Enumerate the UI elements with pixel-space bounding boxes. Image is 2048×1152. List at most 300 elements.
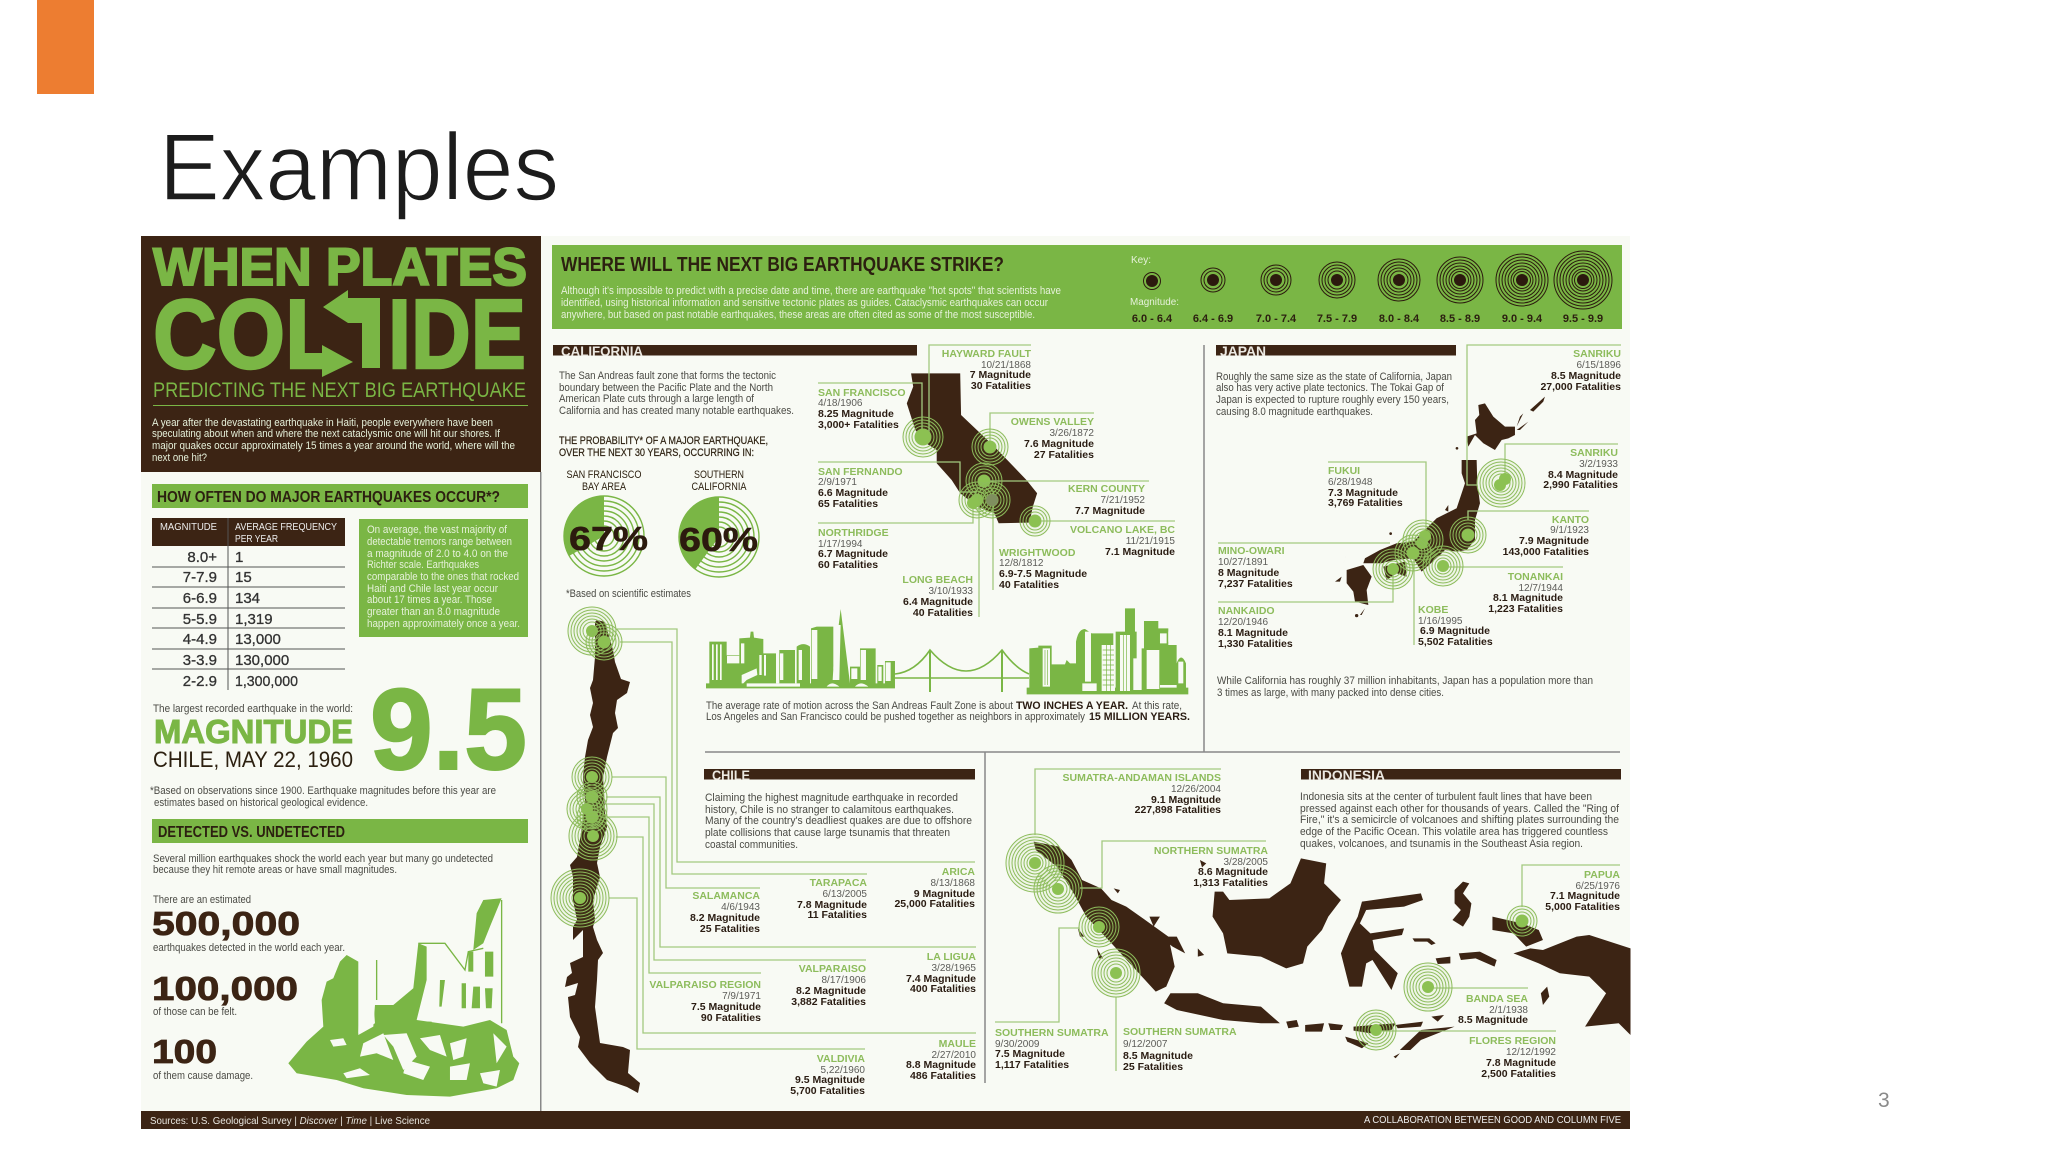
label: maule: MAULE [939,1038,976,1050]
dividers: sections [705,345,1620,1083]
label: southern sumatra 2007: SOUTHERN SUMATRA [1123,1026,1237,1038]
callout: tremors: On average, the vast majority of [367,524,508,536]
label: valparaiso [791,963,866,1008]
label: kanto: KANTO [1552,514,1589,526]
stat: 100: 100 [152,1033,217,1070]
label: san francisco: 8.25 Magnitude [818,408,894,420]
frequency table: 8.0+ [187,549,217,566]
stat: 100: of them cause damage. [153,1070,253,1082]
panel: how often [152,484,528,690]
label: fukui: 7.3 Magnitude [1328,487,1398,499]
label: southern sumatra 2009: 1,117 Fatalities [995,1059,1069,1071]
detected text: Several million earthquakes shock the world each year but many go undetected [153,853,493,865]
label: northern sumatra: 3/28/2005 [1224,857,1268,868]
label: banda sea: BANDA SEA [1466,993,1528,1005]
pie: san francisco 67% [564,469,648,576]
label: wrightwood: WRIGHTWOOD [999,547,1076,559]
label: tonankai: 1,223 Fatalities [1488,603,1563,615]
callout lines: california [818,345,1175,617]
label: sumatra-andaman: 9.1 Magnitude [1151,794,1221,806]
heading: japan [1216,343,1456,359]
label: long beach: 40 Fatalities [913,607,973,619]
pie: southern california 60%: SOUTHERN [694,469,744,481]
frequency table: 1,319 [235,611,273,628]
label: kanto: 143,000 Fatalities [1503,546,1589,558]
label: papua: PAPUA [1584,869,1620,881]
san andreas text: 15 MILLION YEARS. [1089,711,1190,723]
panel: japan [1216,343,1621,699]
panel: indonesia [995,767,1631,1080]
label: kobe [1418,604,1493,648]
callout: tremors: about 17 times a year. Those [367,594,492,606]
chile date: CHILE, MAY 22, 1960 [153,747,353,772]
frequency table [152,518,345,690]
label: southern sumatra 2009: SOUTHERN SUMATRA [995,1027,1109,1039]
label: sanriku 1933: SANRIKU [1570,447,1618,459]
icon: arrow left with stem [323,290,380,368]
label: sumatra-andaman: 12/26/2004 [1171,784,1221,795]
label: owens valley: 7.6 Magnitude [1024,438,1094,450]
label: san francisco: 4/18/1906 [818,398,863,409]
heading: indonesia: INDONESIA [1308,767,1385,783]
indonesia text: Fire," it's a semicircle of volcanoes and shifting plates surrounding the [1300,814,1619,826]
legend: magnitude key: Key: [1131,255,1151,266]
frequency table: 6-6.9 [183,590,217,607]
chile text: plate collisions that cause large tsunamis that threaten [705,827,950,839]
epicenters: japan [1373,459,1525,589]
pie: san francisco 67%: BAY AREA [582,481,627,493]
stat: 100,000: 100,000 [152,970,298,1007]
label: volcano lake: 11/21/1915 [1126,536,1175,547]
label: la ligua: LA LIGUA [927,951,976,963]
callout: tremors: greater than an 8.0 magnitude [367,606,500,618]
legend: magnitude key: 8.5 - 8.9 [1440,313,1480,325]
label: sanriku 1896: SANRIKU [1573,348,1621,360]
label: maule: 8.8 Magnitude [906,1059,976,1071]
description: anywhere, but based on past notable earthquakes, these areas are often cited as some of the most susceptible. [561,309,1035,321]
label: arica: 9 Magnitude [914,888,975,900]
label: banda sea: 8.5 Magnitude [1458,1014,1528,1026]
pie: southern california 60%: CALIFORNIA [692,481,747,493]
intro text: A year after the devastating earthquake in Haiti, people everywhere have been [152,417,493,429]
label: salamanca: 8.2 Magnitude [690,912,760,924]
callout: tremors: comparable to the ones that rocked [367,571,519,583]
slide title: Examples [159,114,559,221]
frequency table: PER YEAR [235,533,278,545]
label: long beach: LONG BEACH [902,574,973,586]
chile text: coastal communities. [705,839,798,851]
label: sanriku 1933: 8.4 Magnitude [1548,469,1618,481]
label: kanto: 7.9 Magnitude [1519,535,1589,547]
label: la ligua: 7.4 Magnitude [906,973,976,985]
label: southern sumatra 2007 [1123,1026,1237,1073]
label: maule [906,1038,976,1082]
description: identified, using historical information and sensitive tectonic plates as guides. Cataclysmic earthquakes can occur [561,297,1048,309]
japan text: causing 8.0 magnitude earthquakes. [1216,406,1373,418]
heading: california [553,343,917,359]
legend: magnitude key: Magnitude: [1130,297,1179,308]
infographic [141,236,1631,1129]
legend: magnitude key: 9.5 - 9.9 [1563,313,1603,325]
magnitude heading: MAGNITUDE [154,713,353,750]
page number: 3 [1878,1089,1890,1112]
panel: detected vs undetected [152,819,528,1097]
label: tarapaca: TARAPACA [810,877,867,889]
heading: when plates: WHEN PLATES [153,238,527,297]
divider: left column [540,472,542,1111]
san andreas text: At this rate, [1132,700,1182,712]
callout lines: indonesia [995,769,1620,1071]
heading: collide: IDE [388,279,526,389]
probability heading: THE PROBABILITY* OF A MAJOR EARTHQUAKE, [559,435,768,447]
footnote: *Based on observations since 1900. Earthquake magnitudes before this year are [150,785,496,797]
label: flores region: 2,500 Fatalities [1481,1068,1556,1080]
frequency table: 1 [235,549,243,566]
callout: tremors: detectable tremors range between [367,536,512,548]
label: northridge: 60 Fatalities [818,559,878,571]
label: northridge: 6.7 Magnitude [818,548,888,560]
heading: indonesia [1301,767,1621,783]
epicenters: indonesia [1006,834,1537,1050]
san andreas text: TWO INCHES A YEAR. [1016,700,1128,712]
frequency table: 7-7.9 [183,569,217,586]
big number 9.5: 9.5 [370,666,527,794]
label: southern sumatra 2009 [995,1027,1109,1071]
indonesia text: quakes, volcanoes, and tsunamis in the Southeast Asia region. [1300,838,1583,850]
label: arica: 25,000 Fatalities [894,898,975,910]
frequency table: 15 [235,569,252,586]
frequency table: AVERAGE FREQUENCY [235,521,337,533]
label: valparaiso region: 7/9/1971 [722,991,761,1002]
label: valparaiso: 3,882 Fatalities [791,996,866,1008]
callout: tremors [359,519,528,637]
frequency table: 134 [235,590,260,607]
indonesia text: edge of the Pacific Ocean. This volatile area has triggered countless [1300,826,1608,838]
label: salamanca: 25 Fatalities [700,923,760,935]
label: kanto: 9/1/1923 [1550,525,1589,536]
intro text: speculating about when and where the next cataclysmic one will hit our shores. If [152,428,501,440]
probability heading: OVER THE NEXT 30 YEARS, OCCURRING IN: [559,447,754,459]
frequency table: 1,300,000 [235,673,298,690]
label: maule: 486 Fatalities [910,1070,976,1082]
label: valparaiso region: 7.5 Magnitude [691,1001,761,1013]
legend: magnitude key: 7.5 - 7.9 [1317,313,1357,325]
subtitle: PREDICTING THE NEXT BIG EARTHQUAKE [153,379,526,402]
label: valdivia: 9.5 Magnitude [795,1074,865,1086]
label: sumatra-andaman: 227,898 Fatalities [1135,804,1221,816]
label: southern sumatra 2007: 8.5 Magnitude [1123,1050,1193,1062]
heading: WHERE WILL THE NEXT BIG EARTHQUAKE STRIKE? [561,254,1004,276]
callout lines: japan [1218,345,1621,645]
label: sanriku 1896: 6/15/1896 [1576,360,1621,371]
label: papua: 6/25/1976 [1576,881,1620,892]
japan text: Japan is expected to rupture roughly every 150 years, [1216,394,1449,406]
label: flores region: 12/12/1992 [1506,1047,1556,1058]
label: mino-owari: 7,237 Fatalities [1218,578,1293,590]
intro text: next one hit? [152,452,207,464]
label: san fernando: SAN FERNANDO [818,466,903,478]
slide accent: orange block [37,0,94,94]
label: sanriku 1933: 3/2/1933 [1579,459,1618,470]
icon: arrow right [300,345,353,377]
label: valparaiso: VALPARAISO [799,963,866,975]
label: long beach [902,574,973,619]
label: san francisco [818,387,906,431]
label: sanriku 1896: 8.5 Magnitude [1551,370,1621,382]
label: valdivia: VALDIVIA [817,1053,865,1065]
callout lines: chile [606,629,976,1049]
label: fukui: 3,769 Fatalities [1328,497,1403,509]
label: hayward fault: 7 Magnitude [970,369,1031,381]
label: valdivia [790,1053,865,1097]
detected text: because they hit remote areas or have small magnitudes. [153,864,397,876]
label: fukui: 6/28/1948 [1328,477,1373,488]
california text [559,370,794,417]
label: hayward fault: HAYWARD FAULT [942,348,1032,360]
label: san fernando: 6.6 Magnitude [818,487,888,499]
label: volcano lake: 7.1 Magnitude [1105,546,1175,558]
label: long beach: 3/10/1933 [928,586,973,597]
label: kern county: 7.7 Magnitude [1075,505,1145,517]
label: valparaiso: 8/17/1906 [822,975,866,986]
callout: tremors: a magnitude of 2.0 to 4.0 on the [367,548,508,560]
label: nankaido: 1,330 Fatalities [1218,638,1293,650]
label: kanto [1503,514,1589,558]
probability heading [559,435,768,459]
japan text [1216,371,1452,418]
california text: boundary between the Pacific Plate and the North [559,382,773,394]
frequency table: 4-4.9 [183,631,217,648]
label: tonankai: TONANKAI [1508,571,1563,583]
label: arica: 8/13/1868 [930,878,975,889]
label: southern sumatra 2007: 25 Fatalities [1123,1061,1183,1073]
map: chile [565,620,640,1093]
label: northern sumatra: NORTHERN SUMATRA [1154,845,1268,857]
label: mino-owari: MINO-OWARI [1218,545,1285,557]
california text: American Plate cuts through a large length of [559,393,755,405]
label: sumatra-andaman: SUMATRA-ANDAMAN ISLANDS [1063,772,1221,784]
label: volcano lake [1070,524,1175,558]
label: mino-owari: 10/27/1891 [1218,557,1268,568]
frequency table: 13,000 [235,631,281,648]
frequency table: 2-2.9 [183,673,217,690]
frequency table: 3-3.9 [183,652,217,669]
frequency table: 130,000 [235,652,289,669]
label: tarapaca: 6/13/2005 [822,889,867,900]
callout: tremors: Haiti and Chile last year occur [367,583,498,595]
label: fukui [1328,465,1403,509]
label: papua [1545,869,1620,913]
heading: detected: DETECTED VS. UNDETECTED [158,824,345,841]
label: hayward fault: 10/21/1868 [981,360,1031,371]
label: southern sumatra 2009: 7.5 Magnitude [995,1048,1065,1060]
label: flores region [1469,1035,1556,1080]
label: sumatra-andaman [1063,772,1221,816]
pie: southern california 60%: 60% [679,521,758,558]
label: kobe: 1/16/1995 [1418,616,1463,627]
label: wrightwood: 40 Fatalities [999,579,1059,591]
label: mino-owari [1218,545,1293,590]
heading: how often: HOW OFTEN DO MAJOR EARTHQUAKES OCCUR*? [157,489,500,506]
label: long beach: 6.4 Magnitude [903,596,973,608]
legend: magnitude key: 7.0 - 7.4 [1256,313,1297,325]
label: valdivia: 5,22/1960 [820,1065,865,1076]
indonesia text: pressed against each other for thousands of years. Called the "Ring of [1300,803,1620,815]
description [561,285,1061,321]
label: kern county: KERN COUNTY [1068,483,1145,495]
description: Although it's impossible to predict with a precise date and time, there are earthquake "hot spots" that scientists have [561,285,1061,297]
label: northridge: 1/17/1994 [818,539,863,550]
label: valparaiso region: 90 Fatalities [701,1012,761,1024]
label: flores region: FLORES REGION [1469,1035,1556,1047]
frequency table: 5-5.9 [183,611,217,628]
label: arica [894,866,975,910]
heading: collide: COL [153,279,339,389]
indonesia text: Indonesia sits at the center of turbulent fault lines that have been [1300,791,1592,803]
map: japan [1335,397,1545,617]
label: valparaiso: 8.2 Magnitude [796,985,866,997]
heading: collide [153,279,526,389]
label: northern sumatra [1154,845,1268,889]
legend: magnitude key [1130,251,1612,325]
label: volcano lake: VOLCANO LAKE, BC [1070,524,1175,536]
label: tonankai: 12/7/1944 [1518,583,1563,594]
stat: 500,000: earthquakes detected in the world each year. [153,942,345,954]
label: owens valley: 27 Fatalities [1034,449,1094,461]
callout: tremors: Richter scale. Earthquakes [367,559,479,571]
label: tonankai [1488,571,1563,615]
label: northern sumatra: 8.6 Magnitude [1198,866,1268,878]
footnote [150,785,496,809]
footnote: estimates based on historical geological evidence. [154,797,368,809]
legend: magnitude key: 9.0 - 9.4 [1502,313,1543,325]
label: banda sea: 2/1/1938 [1489,1005,1528,1016]
label: flores region: 7.8 Magnitude [1486,1057,1556,1069]
label: wrightwood: 12/8/1812 [999,558,1044,569]
label: hayward fault [942,348,1032,392]
label: maule: 2/27/2010 [932,1050,976,1061]
label: san fernando [818,466,903,510]
label: kobe: 6.9 Magnitude [1420,625,1490,637]
label: mino-owari: 8 Magnitude [1218,567,1279,579]
stat: 500,000 [152,905,345,954]
callout: tremors: happen approximately once a year. [367,618,520,630]
label: kobe: 5,502 Fatalities [1418,636,1493,648]
label: owens valley: OWENS VALLEY [1011,416,1094,428]
heading: chile [704,767,975,783]
bridge [895,650,1029,678]
heading: chile: CHILE [712,767,750,783]
label: tarapaca: 7.8 Magnitude [797,899,867,911]
label: nankaido [1218,605,1293,650]
label: papua: 5,000 Fatalities [1545,901,1620,913]
label: wrightwood [999,547,1087,591]
legend: magnitude key: 6.0 - 6.4 [1132,313,1173,325]
label: salamanca: 4/6/1943 [721,902,760,913]
label: wrightwood: 6.9-7.5 Magnitude [999,568,1087,580]
chile text: Claiming the highest magnitude earthquake in recorded [705,792,958,804]
label: la ligua: 3/28/1965 [932,963,976,974]
label: sanriku 1896: 27,000 Fatalities [1540,381,1621,393]
label: northridge: NORTHRIDGE [818,527,889,539]
footer bar [141,1111,1630,1129]
stat: 100,000 [152,970,298,1018]
japan closing text: While California has roughly 37 million inhabitants, Japan has a population more than [1217,675,1593,687]
label: tarapaca [797,877,867,921]
san andreas text: Los Angeles and San Francisco could be pushed together as neighbors in approximately [706,711,1085,723]
pie: san francisco 67%: SAN FRANCISCO [566,469,642,481]
epicenters: california [903,417,1050,536]
label: sanriku 1933: 2,990 Fatalities [1543,479,1618,491]
panel: california [553,343,1190,723]
label: valdivia: 5,700 Fatalities [790,1085,865,1097]
label: fukui: FUKUI [1328,465,1360,477]
label: valparaiso region [649,979,761,1024]
california text: The San Andreas fault zone that forms the tectonic [559,370,776,382]
label: valparaiso region: VALPARAISO REGION [649,979,761,991]
pie: southern california 60% [679,469,759,577]
label: kern county: 7/21/1952 [1100,495,1145,506]
panel: title block [141,236,541,472]
intro text: major quakes occur approximately 15 times a year around the world, where will the [152,440,515,452]
city: los angeles [1027,608,1188,694]
stat: 100,000: of those can be felt. [153,1006,237,1018]
label: nankaido: NANKAIDO [1218,605,1275,617]
label: san francisco: 3,000+ Fatalities [818,419,899,431]
label: banda sea [1458,993,1528,1026]
label: sanriku 1933 [1543,447,1618,491]
label: nankaido: 8.1 Magnitude [1218,627,1288,639]
label: sanriku 1896 [1540,348,1621,393]
legend: magnitude key: 6.4 - 6.9 [1193,313,1233,325]
footnote: scientific estimates: *Based on scientific estimates [566,588,691,600]
collaboration credit: A COLLABORATION BETWEEN GOOD AND COLUMN FIVE [1364,1114,1621,1126]
chile text: Many of the country's deadliest quakes are due to offshore [705,815,972,827]
panel: chile [551,607,976,1097]
icon: collapsed building [288,898,519,1097]
label: tarapaca: 11 Fatalities [807,909,867,921]
stat: 500,000: 500,000 [152,905,300,942]
heading: japan: JAPAN [1220,343,1266,359]
pie: san francisco 67%: 67% [569,520,648,557]
legend: magnitude key: 8.0 - 8.4 [1379,313,1420,325]
san andreas text: The average rate of motion across the San Andreas Fault Zone is about [706,700,1013,712]
san andreas text [706,700,1190,723]
heading: california: CALIFORNIA [561,343,643,359]
sources: Sources: U.S. Geological Survey | Discover | Time | Live Science [150,1115,430,1127]
label: owens valley [1011,416,1094,461]
skyline illustration [706,608,1188,694]
panel: largest earthquake [150,666,527,809]
frequency table: MAGNITUDE [160,521,217,533]
detected text: There are an estimated [153,894,251,906]
label: san fernando: 2/9/1971 [818,477,857,488]
intro text [152,417,515,464]
city: san francisco [706,609,895,688]
label: tonankai: 8.1 Magnitude [1493,592,1563,604]
label: kobe: KOBE [1418,604,1448,616]
label: southern sumatra 2009: 9/30/2009 [995,1039,1040,1050]
label: salamanca [690,890,760,935]
japan closing text [1217,675,1593,699]
label: san francisco: SAN FRANCISCO [818,387,906,399]
panel: largest earthquake: The largest recorded earthquake in the world: [153,703,353,715]
label: owens valley: 3/26/1872 [1050,428,1094,439]
label: southern sumatra 2007: 9/12/2007 [1123,1039,1168,1050]
japan text: also has very active plate tectonics. The Tokai Gap of [1216,382,1445,394]
label: hayward fault: 30 Fatalities [971,380,1031,392]
label: kern county [1068,483,1145,517]
